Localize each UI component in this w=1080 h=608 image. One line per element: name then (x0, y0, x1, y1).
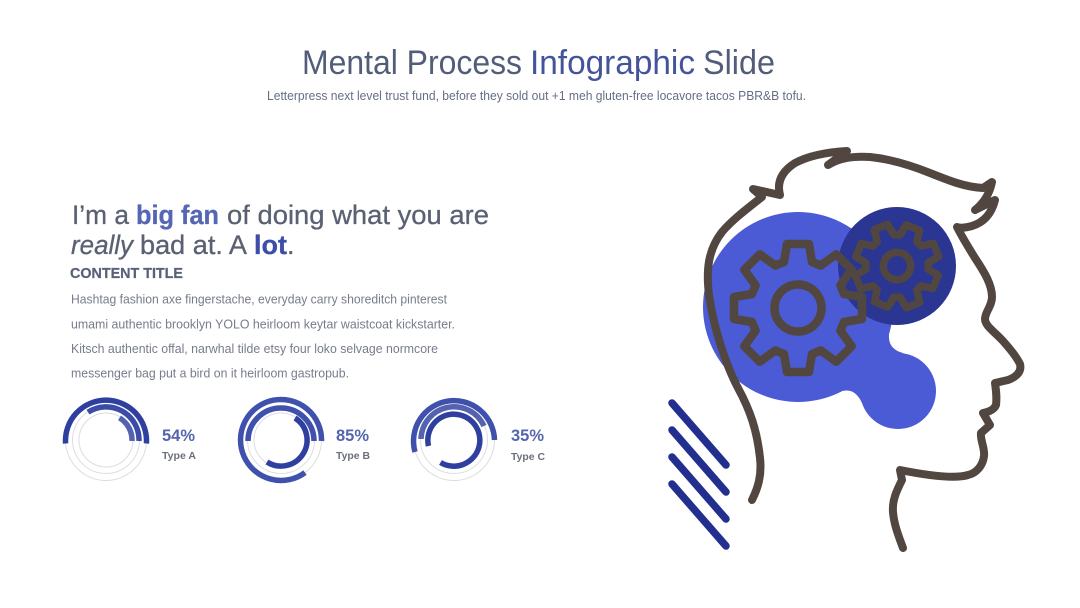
label: Type A: Type A (162, 450, 196, 462)
label: Type B (336, 427, 370, 462)
body text: Hashtag fashion axe fingerstache, everyday carry shoreditch pinterest (71, 292, 448, 306)
title (302, 44, 775, 82)
dark circle (838, 207, 956, 325)
content title: CONTENT TITLE (70, 266, 183, 282)
label: Type A (162, 427, 196, 462)
label: Type B: 85% (336, 427, 369, 445)
body text: umami authentic brooklyn YOLO heirloom keytar waistcoat kickstarter. (71, 318, 455, 332)
body text (71, 292, 455, 380)
ring chart: Type C (414, 400, 494, 480)
heading: big fan (136, 200, 219, 230)
heading: of doing what you are (227, 200, 489, 230)
heading: bad at. A (140, 230, 247, 260)
body text: Kitsch authentic offal, narwhal tilde etsy four loko selvage normcore (71, 342, 438, 356)
heading: I’m a (72, 200, 130, 230)
ring chart: Type B (240, 399, 322, 480)
label: Type C: Type C (511, 451, 545, 463)
label: Type C: 35% (511, 427, 544, 445)
label: Type A: 54% (162, 427, 195, 445)
head outline (708, 151, 1020, 548)
title: Slide (703, 44, 775, 82)
decorative diagonal stripes icon (672, 403, 726, 546)
icon: small gear (843, 212, 951, 320)
icon: large gear (734, 244, 862, 372)
heading: really (71, 230, 134, 260)
subtitle: Letterpress next level trust fund, before they sold out +1 meh gluten-free locavore tacos PBR&B tofu. (267, 88, 806, 103)
body text: messenger bag put a bird on it heirloom gastropub. (71, 366, 349, 380)
label: Type B: Type B (336, 450, 370, 462)
heading: . (287, 230, 295, 260)
brain blob (703, 212, 936, 429)
heading: lot (254, 230, 287, 260)
title: Mental Process (302, 44, 522, 82)
ring chart: Type A (66, 400, 146, 480)
title: Infographic (530, 44, 695, 82)
heading (71, 200, 489, 260)
label: Type C (511, 427, 545, 463)
